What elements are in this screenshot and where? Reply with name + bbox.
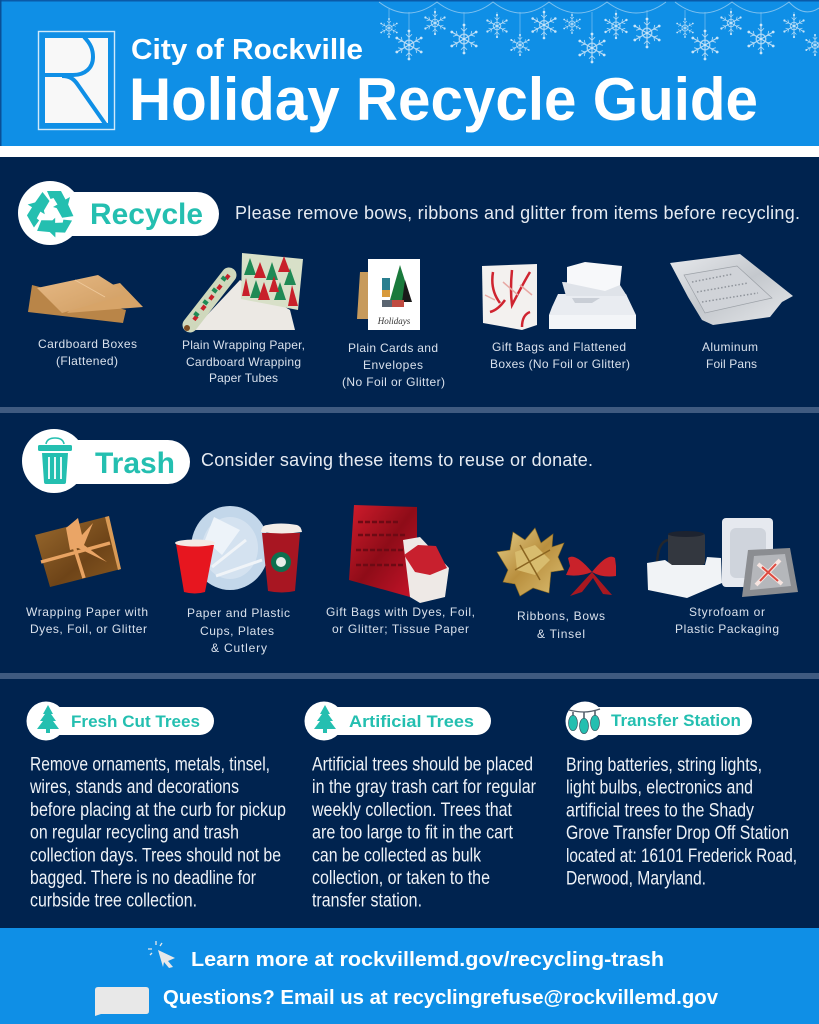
item: gift bags and flattened boxes: Boxes (No Foil or Glitter) <box>490 357 630 371</box>
text: transfer station <box>566 755 797 890</box>
badge: transfer station: Transfer Station <box>611 712 741 730</box>
text: artificial trees: transfer station. <box>312 891 422 912</box>
item: gift bags and flattened boxes <box>482 262 636 371</box>
trash badge <box>22 429 190 493</box>
panel: artificial trees <box>304 702 537 912</box>
item: gift bags with dyes and tissue <box>326 505 475 636</box>
icon: cursor click <box>148 941 175 968</box>
panel: recycle <box>18 181 800 389</box>
text: transfer station: Bring batteries, string lights, <box>566 755 762 776</box>
text: artificial trees <box>311 754 537 912</box>
item: styrofoam or plastic packaging: Plastic Packaging <box>675 622 779 636</box>
text: fresh cut trees: curbside tree collection. <box>30 891 197 912</box>
item: cups, plates and cutlery: & Cutlery <box>211 641 267 655</box>
item: plain cards and envelopes: Holidays <box>377 316 411 326</box>
item: wrapping paper with foil <box>26 516 148 636</box>
text: transfer station: artificial trees to the Shady <box>566 800 754 821</box>
recycle badge <box>18 181 219 245</box>
badge: artificial trees <box>304 702 491 740</box>
text: artificial trees: weekly collection. Trees that <box>311 800 513 821</box>
recycle badge: Recycle <box>90 198 203 231</box>
item: cardboard boxes: Cardboard Boxes <box>38 337 137 351</box>
icon: speech bubble <box>95 987 149 1016</box>
trash instruction: Consider saving these items to reuse or donate. <box>201 450 593 470</box>
text: transfer station: light bulbs, electronics and <box>566 778 753 799</box>
item: gift bags with dyes and tissue: Gift Bags with Dyes, Foil, <box>326 605 475 619</box>
header banner <box>0 0 819 157</box>
text: artificial trees: in the gray trash cart for regular <box>312 777 537 798</box>
item: ribbons, bows and tinsel: Ribbons, Bows <box>517 609 605 623</box>
badge: transfer station <box>566 702 752 740</box>
item: wrapping paper with foil: Wrapping Paper with <box>26 605 148 619</box>
text: artificial trees: can be collected as bulk <box>312 845 481 866</box>
item: cardboard boxes: (Flattened) <box>56 354 118 368</box>
text: artificial trees: collection, or taken to the <box>312 868 490 889</box>
text: artificial trees: are too large to fit in the cart <box>312 823 514 844</box>
item: aluminum foil pans <box>670 254 793 371</box>
title: Holiday Recycle Guide: Holiday Recycle Guide <box>129 66 758 133</box>
text: fresh cut trees: collection days. Trees should not be <box>30 845 281 866</box>
item: plain wrapping paper and tubes <box>182 253 305 385</box>
item: plain wrapping paper and tubes: Paper Tubes <box>209 371 278 385</box>
text: fresh cut trees: Remove ornaments, metals, tinsel, <box>30 754 270 776</box>
item: plain cards and envelopes <box>342 259 445 389</box>
item: gift bags and flattened boxes: Gift Bags and Flattened <box>492 340 626 354</box>
text: fresh cut trees: on regular recycling and trash <box>30 823 239 844</box>
footer band <box>0 928 819 1024</box>
text: transfer station: Derwood, Maryland. <box>566 868 706 890</box>
panel: transfer station <box>566 702 797 890</box>
text: fresh cut trees: wires, stands and decorations <box>29 777 239 798</box>
item: styrofoam or plastic packaging: Styrofoam or <box>689 605 765 619</box>
item: cups, plates and cutlery <box>175 506 302 655</box>
snowflake garland <box>379 2 819 63</box>
item: plain wrapping paper and tubes: Plain Wrapping Paper, <box>182 338 305 352</box>
item: plain cards and envelopes: Envelopes <box>363 358 423 372</box>
panel: trash <box>22 429 798 655</box>
badge: fresh cut trees <box>26 702 214 740</box>
recycle instruction: Please remove bows, ribbons and glitter from items before recycling. <box>235 203 800 223</box>
panel: fresh cut trees <box>26 702 286 912</box>
logo: City of Rockville R <box>38 32 114 130</box>
item: ribbons, bows and tinsel <box>497 528 616 641</box>
badge: artificial trees: Artificial Trees <box>349 713 474 731</box>
item: aluminum foil pans: Foil Pans <box>706 357 757 371</box>
text: fresh cut trees: bagged. There is no deadline for <box>30 868 257 889</box>
trash badge: Trash <box>95 447 175 480</box>
item: cardboard boxes <box>28 275 143 368</box>
item: plain wrapping paper and tubes: Cardboard Wrapping <box>186 355 301 369</box>
email contact: Questions? Email us at recyclingrefuse@rockvillemd.gov <box>163 986 719 1009</box>
subtitle: City of Rockville: City of Rockville <box>131 34 363 66</box>
text: fresh cut trees: before placing at the curb for pickup <box>30 800 286 821</box>
item: cups, plates and cutlery: Paper and Plastic <box>187 606 290 620</box>
badge: fresh cut trees: Fresh Cut Trees <box>71 713 200 731</box>
item: gift bags with dyes and tissue: or Glitter; Tissue Paper <box>332 622 469 636</box>
text: fresh cut trees <box>29 754 286 912</box>
item: aluminum foil pans: Aluminum <box>702 340 758 354</box>
item: ribbons, bows and tinsel: & Tinsel <box>537 627 585 641</box>
text: artificial trees: Artificial trees should be placed <box>312 754 533 776</box>
item: wrapping paper with foil: Dyes, Foil, or Glitter <box>30 622 147 636</box>
learn more link: Learn more at rockvillemd.gov/recycling-trash <box>191 948 664 971</box>
item: plain cards and envelopes: (No Foil or Glitter) <box>342 375 445 389</box>
item: plain cards and envelopes: Plain Cards and <box>348 341 438 355</box>
item: cups, plates and cutlery: Cups, Plates <box>200 624 274 638</box>
item: styrofoam or plastic packaging <box>647 518 798 636</box>
